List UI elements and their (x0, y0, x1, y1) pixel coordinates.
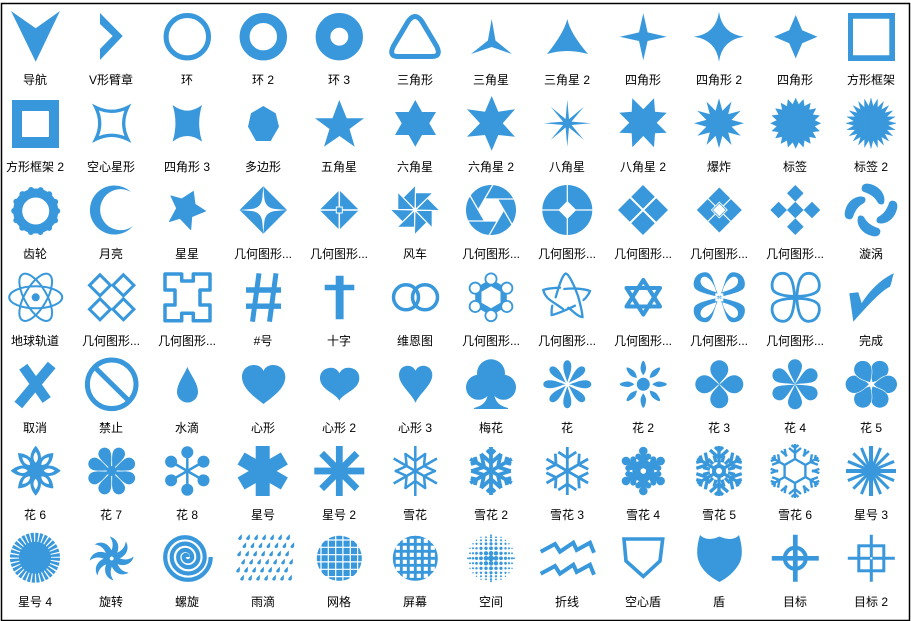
icon: 水滴 (177, 367, 198, 403)
icon: 几何图形 四菱框 (90, 275, 134, 320)
label: 折线: 折线 (555, 594, 579, 609)
label: 几何图形: 几何图形... (234, 247, 292, 261)
label: 旋转: 旋转 (99, 594, 123, 609)
icon: 六角星 2 (467, 96, 515, 151)
icon: 梅花 (466, 359, 516, 409)
icon: 几何图形 菱形星 (239, 186, 287, 234)
icon: 雪花 5 (692, 446, 746, 496)
label: 盾: 盾 (713, 595, 725, 609)
icon: 折线 (541, 543, 594, 575)
label: 六角星 2: 六角星 2 (468, 160, 514, 174)
label: 几何图形: 几何图形... (614, 334, 672, 348)
icon: 几何图形 交织星 (543, 274, 590, 317)
label: 目标: 目标 (783, 595, 807, 609)
icon: 维恩图 (394, 285, 438, 310)
icon: 四角形 2 (694, 12, 744, 62)
icon: 目标 2 (848, 535, 895, 582)
icon: 八角星 (544, 100, 591, 147)
label: 几何图形: 几何图形... (766, 247, 824, 261)
label: 四角形 alt: 四角形 (777, 73, 813, 87)
label: 花 6: 花 6 (24, 507, 46, 522)
label: 风车: 风车 (403, 246, 427, 261)
label: 雪花 4: 雪花 4 (626, 507, 660, 522)
icon: 雪花 4 (617, 447, 670, 495)
icon: 几何图形 铜钱 (541, 184, 593, 236)
icon: 三角星 (471, 19, 512, 54)
icon: 取消 (18, 365, 52, 405)
label: 方形框架 2: 方形框架 2 (6, 159, 64, 174)
icon: 螺旋 (165, 537, 211, 580)
label: 心形 3: 心形 3 (398, 421, 432, 435)
icon: 多边形 (248, 106, 279, 141)
label: 禁止: 禁止 (99, 421, 123, 435)
label: V形臂章: V形臂章 (89, 72, 133, 87)
icon: 雪花 (388, 446, 442, 496)
label: 花 7: 花 7 (100, 507, 122, 522)
label: 空心星形: 空心星形 (87, 160, 135, 174)
label: 标签: 标签 (783, 159, 807, 174)
icon: 雪花 3 (542, 447, 593, 495)
label: 几何图形: 几何图形... (766, 334, 824, 348)
label: 六角星: 六角星 (397, 160, 433, 174)
icon: 几何图形 光圈 (466, 184, 516, 236)
label: 空间: 空间 (479, 595, 503, 609)
label: 漩涡: 漩涡 (859, 247, 883, 261)
label: 十字: 十字 (327, 333, 351, 348)
icon: 几何图形 大卫星 (626, 280, 660, 314)
icon: 盾 (697, 535, 742, 582)
label: 完成: 完成 (859, 333, 883, 348)
icon: 星号 (238, 446, 288, 496)
icon: 星号 3 (846, 446, 896, 496)
label: 星号 3: 星号 3 (854, 508, 888, 522)
icon: 空心盾 (624, 539, 663, 576)
label: 五角星: 五角星 (321, 160, 357, 174)
icon: 四角形 (620, 13, 667, 60)
icon: 四角形 alt (774, 15, 817, 58)
icon: 标签 (771, 98, 821, 148)
icon: 空间 (467, 535, 515, 582)
icon: 花 7 (86, 446, 137, 496)
label: 星号: 星号 (251, 508, 275, 522)
icon: 星号 4 (15, 538, 55, 578)
icon: 几何图形 粗四叶结 (694, 272, 745, 322)
label: 花 8: 花 8 (176, 507, 198, 522)
icon: 旋转 (90, 536, 134, 580)
label: 四角形 3: 四角形 3 (164, 160, 210, 174)
label: 四角形: 四角形 (625, 73, 661, 87)
icon: 屏幕 (392, 535, 438, 581)
icon: 目标 (772, 535, 819, 582)
label: 雪花 5: 雪花 5 (702, 507, 736, 522)
label: 多边形: 多边形 (245, 160, 281, 174)
label: 几何图形: 几何图形... (462, 247, 520, 261)
label: 几何图形: 几何图形... (310, 247, 368, 261)
icon: 六角星 (395, 100, 436, 147)
label: 几何图形: 几何图形... (158, 334, 216, 348)
icon: 几何图形 拼图框 (165, 274, 210, 321)
label: 雨滴: 雨滴 (251, 594, 275, 609)
icon: 雨滴 (236, 534, 294, 581)
label: 网格: 网格 (327, 594, 351, 609)
icon: 花 8 (163, 446, 212, 496)
icon: 花 (543, 360, 591, 408)
label: 雪花 3: 雪花 3 (550, 507, 584, 522)
icon: 心形 (242, 365, 285, 404)
label: 雪花: 雪花 (403, 507, 427, 522)
label: 地球轨道: 地球轨道 (11, 334, 59, 348)
label: 水滴: 水滴 (175, 420, 199, 435)
icon: 空心星形 (96, 107, 128, 139)
icon: 花 6 (11, 446, 61, 496)
icon: 标签 2 (846, 98, 896, 148)
icon: 漩涡 (845, 184, 897, 236)
label: 环 2: 环 2 (252, 73, 274, 87)
icon: 环 2 (245, 18, 282, 55)
label: 爆炸: 爆炸 (707, 160, 731, 174)
label: 目标 2: 目标 2 (854, 595, 888, 609)
icon: 几何图形 细四叶结 (772, 273, 819, 321)
icon: 花 4 (770, 359, 820, 409)
icon: 几何图形 十字菱形 (319, 190, 359, 230)
label: 花 4: 花 4 (784, 420, 806, 435)
label: 星星: 星星 (175, 247, 199, 261)
label: 星号 2: 星号 2 (322, 508, 356, 522)
icon: 心形 2 (320, 368, 359, 401)
icon: 八角星 2 (619, 98, 667, 147)
icon: 心形 3 (399, 366, 432, 403)
label: 几何图形: 几何图形... (538, 334, 596, 348)
label: 花: 花 (561, 420, 573, 435)
icon: 几何图形 嵌套菱形 (697, 188, 742, 232)
icon: 方形框架 2 (12, 100, 59, 148)
icon: 爆炸 (694, 98, 744, 148)
label: 心形: 心形 (251, 421, 275, 435)
icon: 齿轮 (14, 190, 57, 232)
icon: 雪花 6 (765, 444, 825, 498)
icon: 地球轨道 (9, 269, 62, 326)
icon: 几何图形 四菱形 (618, 185, 668, 235)
icon: 网格 (316, 535, 362, 581)
label: 屏幕: 屏幕 (403, 595, 427, 609)
label: 螺旋: 螺旋 (175, 595, 199, 609)
label: #号: #号 (254, 334, 272, 348)
icon: V形臂章 (100, 13, 123, 60)
label: 几何图形: 几何图形... (690, 247, 748, 261)
label: 标签 2: 标签 2 (854, 159, 888, 174)
icon: 三角星 2 (547, 19, 588, 54)
label: 齿轮: 齿轮 (23, 247, 47, 261)
icon: 风车 (391, 186, 439, 234)
icon: 十字 (325, 276, 354, 319)
label: 雪花 6: 雪花 6 (778, 507, 812, 522)
label: 几何图形: 几何图形... (462, 334, 520, 348)
label: 花 3: 花 3 (708, 420, 730, 435)
icon: 五角星 (315, 100, 364, 147)
icon: 花 3 (695, 360, 743, 408)
label: 几何图形: 几何图形... (82, 334, 140, 348)
label: 方形框架: 方形框架 (847, 72, 895, 87)
icon: 禁止 (87, 360, 136, 409)
icon: 几何图形 五菱形 (770, 185, 820, 235)
icon: 四角形 3 (173, 105, 202, 142)
label: 取消: 取消 (23, 421, 47, 435)
label: 四角形 2: 四角形 2 (696, 73, 742, 87)
label: 环 3: 环 3 (328, 73, 350, 87)
icon: 花 2 (620, 361, 667, 408)
label: 梅花: 梅花 (479, 420, 503, 435)
label: 八角星: 八角星 (549, 160, 585, 174)
label: 星号 4: 星号 4 (18, 595, 52, 609)
icon: 几何图形 六环 (470, 273, 512, 321)
label: 花 5: 花 5 (860, 420, 882, 435)
icon: 完成 (849, 273, 894, 322)
icon: 月亮 (90, 186, 133, 235)
icon: 三角形 (392, 16, 438, 57)
label: 空心盾: 空心盾 (625, 595, 661, 609)
icon: #号 (246, 273, 281, 322)
label: 花 2: 花 2 (632, 420, 654, 435)
icon: 环 (166, 16, 208, 58)
label: 维恩图: 维恩图 (397, 334, 433, 348)
label: 心形 2: 心形 2 (322, 421, 356, 435)
label: 几何图形: 几何图形... (538, 247, 596, 261)
icon: 雪花 2 (465, 447, 517, 495)
icon: 花 5 (845, 357, 897, 411)
label: 月亮: 月亮 (99, 246, 123, 261)
label: 三角形: 三角形 (397, 73, 433, 87)
label: 雪花 2: 雪花 2 (474, 507, 508, 522)
label: 三角星: 三角星 (473, 73, 509, 87)
icon: 导航 (11, 11, 60, 62)
label: 三角星 2: 三角星 2 (544, 73, 590, 87)
label: 几何图形: 几何图形... (690, 334, 748, 348)
label: 几何图形: 几何图形... (614, 247, 672, 261)
icon: 方形框架 (848, 13, 895, 61)
label: 导航: 导航 (23, 72, 47, 87)
icon: 星星 (170, 192, 206, 230)
icon: 环 3 (323, 20, 356, 53)
label: 环: 环 (181, 73, 193, 87)
label: 八角星 2: 八角星 2 (620, 160, 666, 174)
icon: 星号 2 (314, 446, 364, 496)
